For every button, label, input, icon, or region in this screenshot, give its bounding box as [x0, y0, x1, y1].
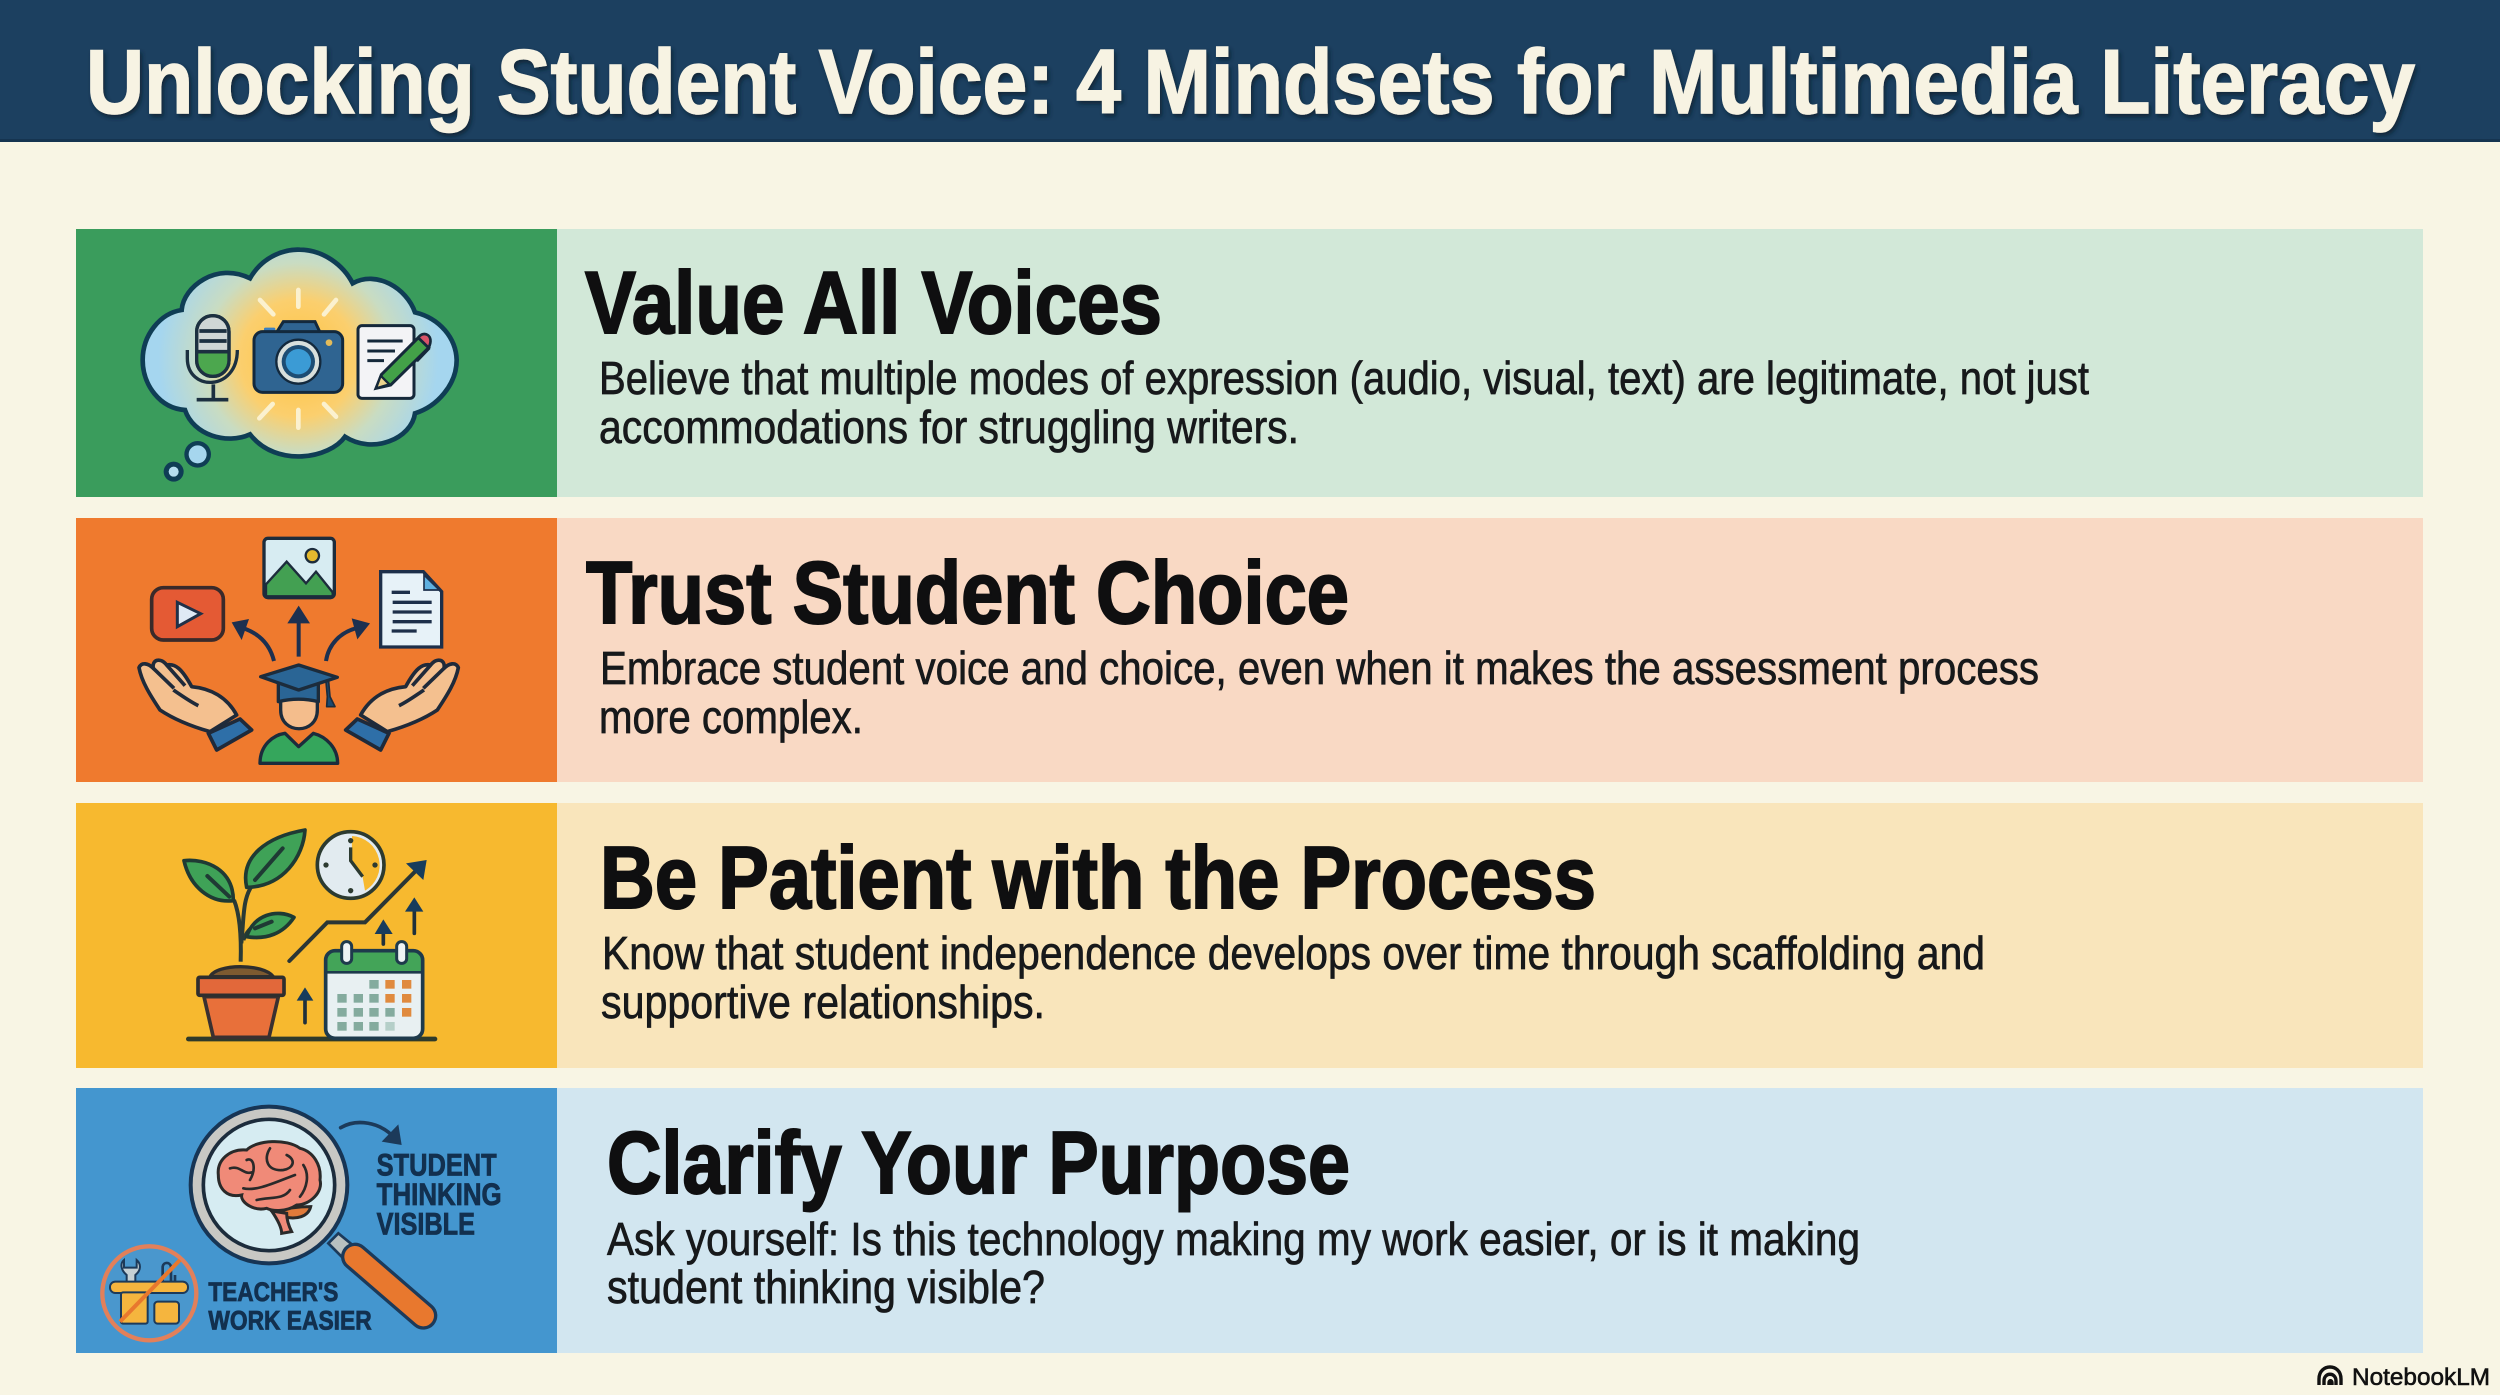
description: value all voices: Believe that multiple modes of expression (audio, visual, text) are legitimate, not just — [599, 352, 2089, 404]
description: clarify your purpose: Ask yourself: Is this technology making my work easier, or is it making — [607, 1213, 1860, 1265]
panel: be patient with the process — [76, 803, 2423, 1068]
title: Unlocking Student Voice: — [86, 32, 1054, 133]
panel: trust student choice — [76, 518, 2423, 782]
label: student thinking visible: STUDENT — [377, 1148, 497, 1183]
description: be patient with the process — [601, 927, 1985, 1028]
notebooklm watermark: NotebookLM — [2352, 1364, 2490, 1391]
icon: hands, student and media choices — [139, 538, 458, 763]
description: trust student choice — [599, 642, 2039, 743]
right hand — [346, 660, 458, 750]
panel: value all voices — [76, 229, 2423, 497]
description: clarify your purpose: student thinking visible? — [607, 1261, 1045, 1313]
label: student thinking visible: THINKING — [377, 1177, 502, 1212]
label: student thinking visible: VISIBLE — [377, 1206, 475, 1241]
document and pencil — [358, 326, 414, 398]
description: trust student choice: Embrace student voice and choice, even when it makes the assessment process — [600, 642, 2039, 694]
description: value all voices — [599, 352, 2089, 453]
description: trust student choice: more complex. — [599, 691, 863, 743]
icon: thought bubble with mic, camera, document — [143, 250, 457, 482]
title — [86, 32, 2415, 133]
description: be patient with the process: Know that student independence develops over time through scaffolding and — [602, 927, 1985, 979]
panel: clarify your purpose — [76, 1088, 2423, 1353]
camera — [277, 322, 320, 332]
icon: plant, clock, growth arrow, calendar — [184, 830, 435, 1039]
student — [260, 665, 338, 763]
heading: trust student choice: Trust Student Choice — [586, 543, 1349, 642]
label: teacher's work easier — [208, 1277, 372, 1335]
heading: be patient with the process: Be Patient with the Process — [600, 828, 1596, 927]
header band — [0, 0, 2500, 142]
left hand — [139, 660, 252, 750]
label: student thinking visible — [377, 1148, 502, 1241]
heading: value all voices: Value All Voices — [585, 253, 1162, 352]
title: 4 Mindsets for — [1076, 32, 1625, 133]
description: be patient with the process: supportive relationships. — [601, 976, 1045, 1028]
label: teacher's work easier: TEACHER'S — [208, 1277, 338, 1307]
title: Multimedia Literacy — [1649, 32, 2415, 133]
label: teacher's work easier: WORK EASIER — [208, 1305, 372, 1335]
mic — [187, 316, 237, 400]
description: clarify your purpose — [607, 1213, 1860, 1313]
crossed-out tool belt — [102, 1246, 196, 1340]
icon: magnifier over brain and crossed-out tool belt — [102, 1107, 502, 1340]
description: value all voices: accommodations for struggling writers. — [599, 401, 1299, 453]
heading: clarify your purpose: Clarify Your Purpose — [607, 1113, 1350, 1212]
